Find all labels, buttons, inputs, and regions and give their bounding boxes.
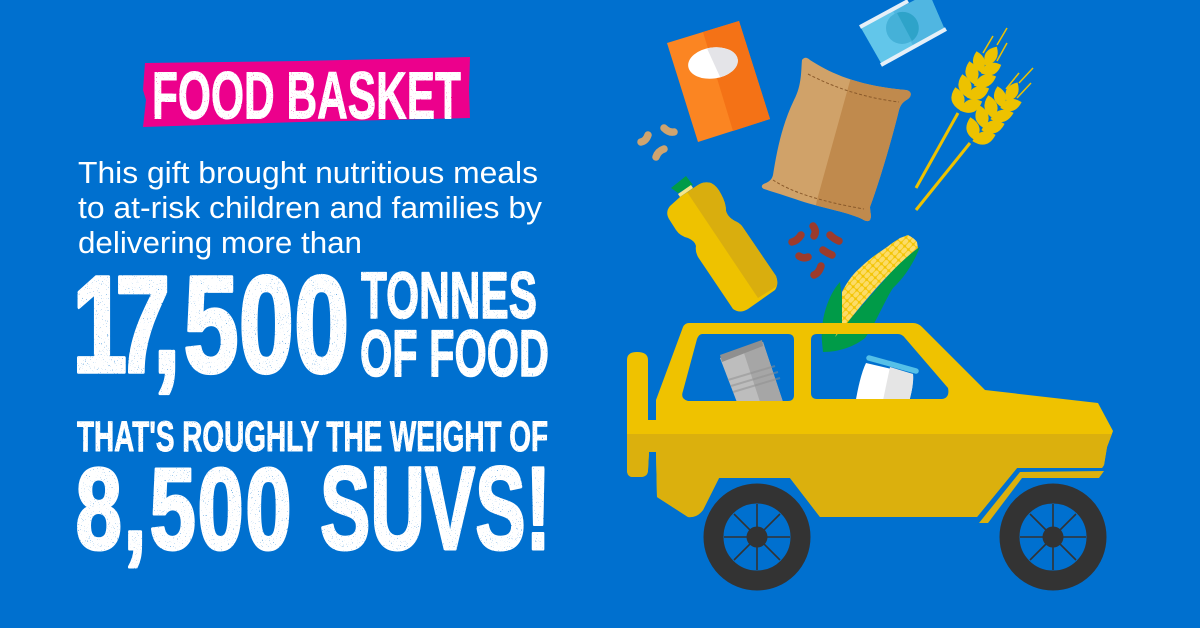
car	[627, 323, 1113, 580]
icon: oil bottle	[667, 176, 777, 312]
icon: jar in car	[855, 358, 916, 405]
wheat stalk one	[916, 28, 1007, 188]
car body	[627, 323, 1113, 517]
intro text block	[78, 156, 543, 260]
illustration: food and car	[627, 0, 1113, 580]
icon: tin can, blue	[860, 0, 946, 65]
icon: cereal box	[667, 21, 770, 142]
panel: text column	[72, 57, 551, 574]
intro text block: delivering more than	[78, 226, 362, 260]
intro text block: to at-risk children and families by	[78, 191, 543, 225]
wheel: rear	[714, 494, 800, 580]
label: tonnes of food: OF FOOD	[360, 316, 549, 390]
icon: wheat stalks	[916, 28, 1033, 210]
car lower body	[627, 434, 1112, 518]
label: tonnes of food: TONNES	[361, 258, 537, 332]
big number: 17,500: 17,500	[72, 248, 349, 402]
comparison line: THAT'S ROUGHLY THE WEIGHT OF	[77, 413, 548, 461]
wheat stalk two	[916, 68, 1033, 210]
intro text block: This gift brought nutritious meals	[78, 156, 538, 190]
icon: peanuts	[641, 128, 674, 157]
car trim	[979, 471, 1104, 523]
heading: food basket: FOOD BASKET	[152, 58, 461, 134]
icon: corn	[822, 235, 920, 352]
icon: beans	[792, 226, 839, 275]
icon: grey tin in car	[720, 340, 784, 405]
wheel: front	[1010, 494, 1096, 580]
big number: 8,500 suvs: 8,500	[76, 446, 293, 574]
big number: 8,500 suvs: SUVS!	[320, 442, 551, 574]
label: tonnes of food	[360, 258, 549, 390]
big number: 8,500 suvs	[76, 442, 551, 574]
icon: sack	[762, 58, 911, 222]
heading: food basket	[143, 57, 470, 134]
